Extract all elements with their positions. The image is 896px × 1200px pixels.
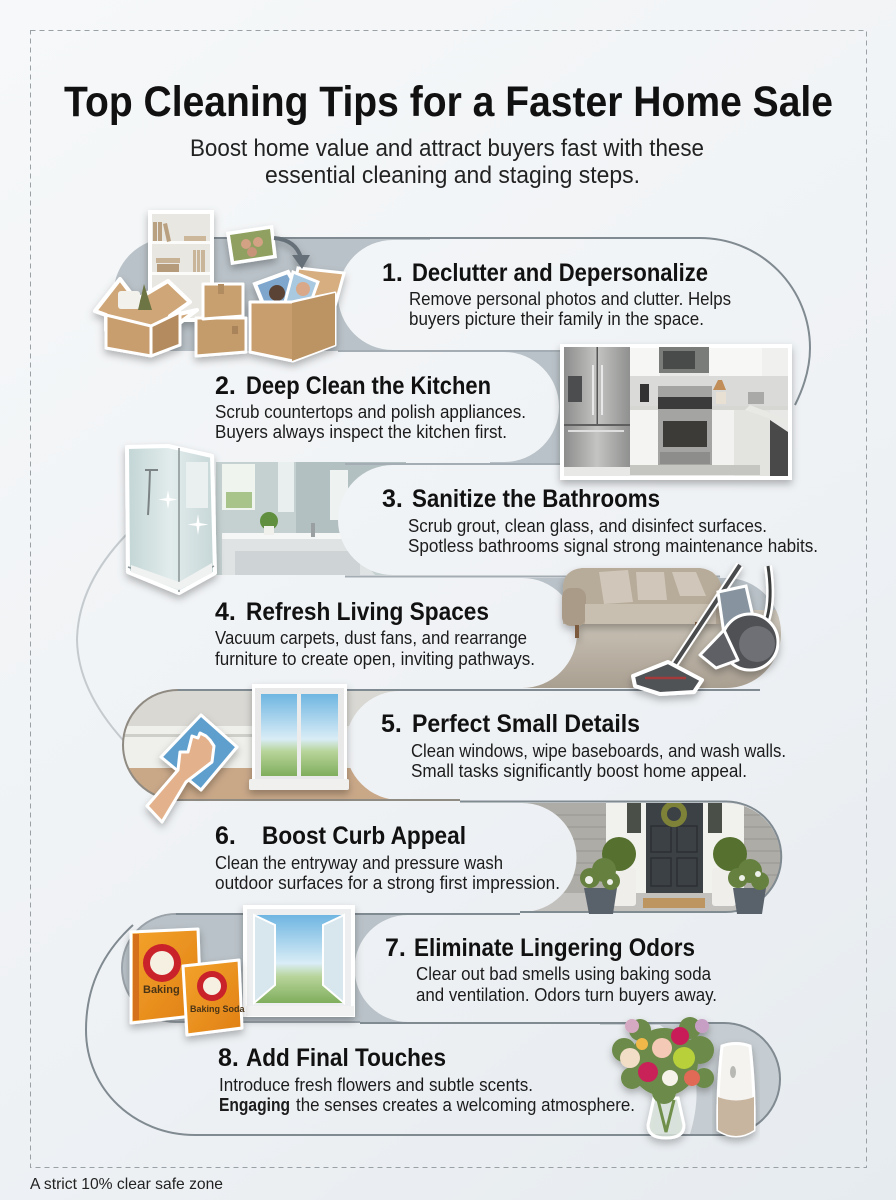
step 8 text: Engaging — [219, 1095, 290, 1115]
stacked boxes — [196, 284, 246, 356]
icon: window on wall — [249, 684, 349, 790]
step 5 heading: Perfect Small Details — [412, 710, 640, 738]
panel: step 6 pill — [130, 803, 576, 912]
large box — [250, 293, 335, 361]
step 2 text — [215, 402, 526, 442]
panel: step 4 pill — [130, 578, 577, 688]
step 8 heading: 8. — [218, 1044, 239, 1072]
range — [658, 386, 712, 465]
panel: step 8 pill — [86, 1025, 697, 1134]
step 3 heading: 3. — [382, 485, 403, 513]
serpentine ribbon background — [77, 238, 780, 1135]
subtitle — [190, 135, 704, 189]
icon: baking soda boxes — [131, 929, 246, 1035]
step 2 text: Buyers always inspect the kitchen first. — [215, 422, 507, 442]
photo: bathroom room — [216, 462, 406, 575]
step 3 heading: Sanitize the Bathrooms — [412, 485, 660, 513]
step 3 text: Spotless bathrooms signal strong maintenance habits. — [408, 536, 818, 556]
footer note: A strict 10% clear safe zone — [30, 1176, 223, 1193]
step 8 text: the senses creates a welcoming atmosphere. — [296, 1095, 635, 1115]
step 6 heading: 6. — [215, 822, 236, 850]
step 4 text: furniture to create open, inviting pathways. — [215, 649, 535, 669]
step 7 text: Clear out bad smells using baking soda — [416, 964, 712, 984]
microwave — [659, 347, 709, 373]
ribbon outline strokes — [86, 238, 810, 1135]
subtitle: essential cleaning and staging steps. — [265, 162, 640, 189]
subtitle: Boost home value and attract buyers fast with these — [190, 135, 704, 162]
step 3 text — [408, 516, 818, 556]
step 6 text: Clean the entryway and pressure wash — [215, 853, 503, 873]
large box: Baking S — [143, 984, 190, 996]
step 4 heading: 4. — [215, 598, 236, 626]
icon: shower enclosure — [127, 446, 215, 593]
family photo print — [226, 225, 277, 265]
step 8 text — [219, 1075, 635, 1115]
small box: Baking Soda — [190, 1004, 246, 1014]
step 5 text — [411, 741, 786, 781]
step 7 heading: 7. — [385, 934, 406, 962]
panel: step 3 pill — [338, 465, 830, 575]
panel: step 2 pill — [130, 352, 559, 462]
step 4 heading: Refresh Living Spaces — [246, 598, 489, 626]
family photos on box — [255, 268, 344, 316]
step 8 heading: Add Final Touches — [246, 1044, 446, 1072]
step 1 text: Remove personal photos and clutter. Helps — [409, 289, 731, 309]
lower cabinets — [630, 405, 788, 476]
icon: vacuum cleaner — [633, 565, 778, 694]
icon: porch planters — [580, 837, 769, 914]
photo: wall and baseboard — [120, 691, 420, 800]
arrow: photo into box — [274, 238, 310, 269]
open box — [95, 279, 197, 356]
step 5 text: Clean windows, wipe baseboards, and wash walls. — [411, 741, 786, 761]
step 5 text: Small tasks significantly boost home appeal. — [411, 761, 747, 781]
step 7 text: and ventilation. Odors turn buyers away. — [416, 985, 717, 1005]
icon: air freshener — [718, 1044, 754, 1136]
step 1 text — [409, 289, 731, 329]
fridge — [564, 347, 630, 467]
step 5 heading: 5. — [381, 710, 402, 738]
step 1 heading: Declutter and Depersonalize — [412, 259, 708, 287]
step 1 heading: 1. — [382, 259, 403, 287]
panel: step 7 pill — [354, 915, 830, 1022]
icon: open window — [243, 905, 355, 1017]
panel: step 1 pill — [338, 240, 807, 350]
icon: sofa — [562, 568, 722, 638]
step 6 heading: Boost Curb Appeal — [262, 822, 466, 850]
step 7 text — [416, 964, 717, 1005]
step 6 text: outdoor surfaces for a strong first impression. — [215, 873, 560, 893]
bookshelf — [148, 210, 214, 322]
step 4 text: Vacuum carpets, dust fans, and rearrange — [215, 628, 527, 648]
step 8 text: Introduce fresh flowers and subtle scents. — [219, 1075, 533, 1095]
icon: flower bouquet in vase — [612, 1017, 714, 1138]
step 6 text — [215, 853, 560, 893]
step 4 text — [215, 628, 535, 669]
icon: hand wiping with cloth — [147, 715, 237, 822]
icon: kitchen photo — [560, 344, 792, 480]
title: Top Cleaning Tips for a Faster Home Sale — [64, 78, 833, 126]
photo: living room floor — [523, 578, 781, 688]
step 2 heading: Deep Clean the Kitchen — [246, 372, 491, 400]
step 2 heading: 2. — [215, 372, 236, 400]
upper cabinets — [630, 348, 788, 410]
photo: porch — [524, 803, 780, 911]
icon: bookshelf, boxes and family photos — [95, 210, 344, 361]
panel: step 5 pill — [346, 691, 830, 800]
step 2 text: Scrub countertops and polish appliances. — [215, 402, 526, 422]
step 7 heading: Eliminate Lingering Odors — [414, 934, 695, 962]
step 3 text: Scrub grout, clean glass, and disinfect surfaces. — [408, 516, 767, 536]
step 1 text: buyers picture their family in the space. — [409, 309, 704, 329]
